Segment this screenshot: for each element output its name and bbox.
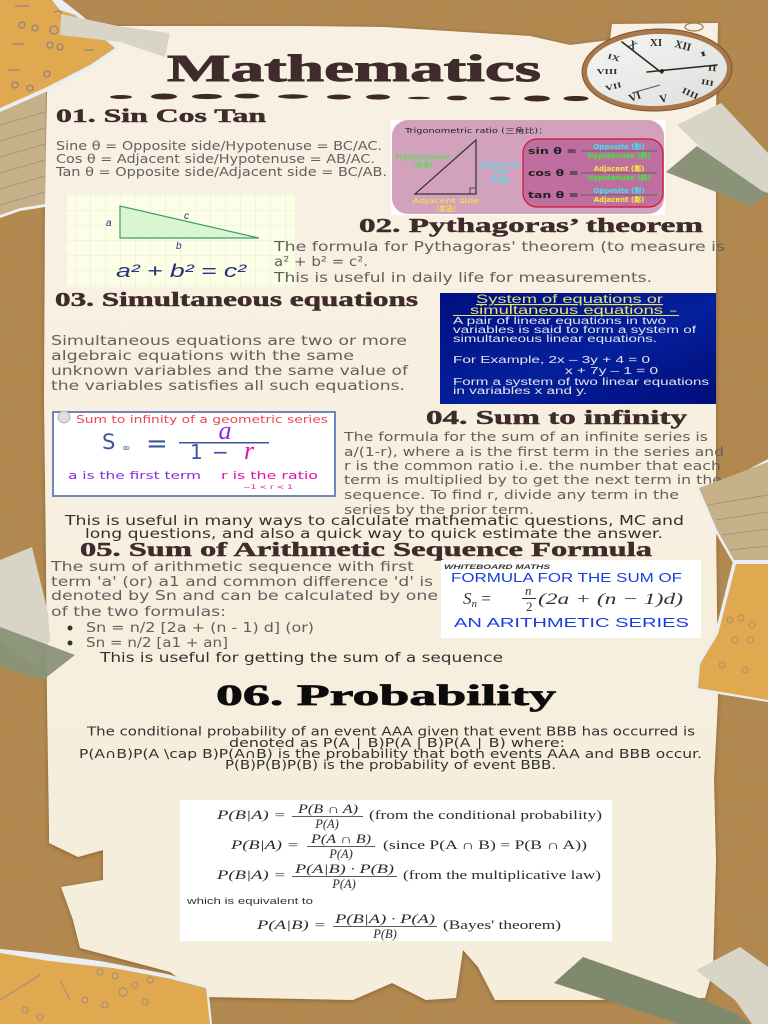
system of equations slide: System of equations or [476, 294, 663, 306]
title: Mathematics [167, 48, 541, 90]
section 06 heading: 06. Probability [216, 679, 556, 712]
arithmetic series formula card: FORMULA FOR THE SUM OF [451, 571, 682, 585]
icon: wall clock: I [699, 49, 708, 59]
line 3 of formula derivation: P(A|B) · P(B) [294, 862, 394, 876]
right triangle diagram: c [184, 211, 189, 222]
trigonometric ratio diagram: Trigonometric ratio (三角比)： [404, 126, 548, 135]
section 03 text: algebraic equations with the same [51, 349, 354, 364]
arithmetic series formula card: (2a + (n − 1)d) [538, 591, 683, 608]
section 04 heading: 04. Sum to infinity [426, 407, 687, 429]
section 05 text: The sum of arithmetic sequence with first [50, 560, 414, 575]
system of equations slide: simultaneous linear equations. [453, 334, 657, 345]
section 02 text: a² + b² = c². [274, 255, 368, 270]
section 04 text: sequence. To find r, divide any term in the [344, 488, 679, 502]
section 01 text: Tan θ = Opposite side/Adjacent side = BC/AB. [55, 165, 387, 179]
arithmetic series formula card: S [463, 589, 472, 608]
icon: wall clock: VI [627, 89, 643, 105]
section 05 text: term 'a' (or) a1 and common difference 'd' is [51, 575, 433, 590]
sum to infinity formula card: − [212, 440, 229, 464]
sum to infinity formula card: −1 < r < 1 [243, 484, 293, 491]
line 2 of formula derivation: P(A ∩ B) [310, 832, 371, 846]
arithmetic series formula card: = [477, 589, 491, 608]
arithmetic series formula card: n [525, 583, 532, 598]
section 04 usefulness note [64, 514, 684, 542]
arithmetic series formula card: 2 [526, 599, 532, 614]
section 02 text [273, 240, 725, 286]
line 1 of formula derivation: P(A) [314, 817, 339, 831]
conditional probability and Bayes formula card [180, 800, 612, 941]
section 05 formula bullets [68, 621, 314, 651]
icon: wall clock: X [626, 38, 639, 53]
trigonometric ratio diagram: tan θ = [528, 191, 579, 201]
section 03 heading: 03. Simultaneous equations [55, 289, 418, 311]
trigonometric ratio diagram [391, 120, 665, 215]
icon: wall clock: XI [650, 37, 662, 49]
section 05 text: of the two formulas: [51, 605, 226, 620]
system of equations slide: in variables x and y. [453, 386, 587, 397]
right triangle diagram: b [176, 241, 182, 252]
section 05 heading: 05. Sum of Arithmetic Sequence Formula [80, 539, 652, 561]
section 04 usefulness note: long questions, and also a quick way to quick estimate the answer. [85, 527, 663, 542]
system of equations slide: – [670, 305, 677, 317]
line 2 of formula derivation: P(B|A) = [230, 838, 299, 852]
brush dash divider under title [110, 94, 588, 102]
section 05 usefulness note: This is useful for getting the sum of a sequence [99, 651, 503, 666]
tape and green strip, left [0, 547, 75, 680]
arithmetic series formula card: n [472, 598, 478, 610]
sum to infinity formula card: ∞ [122, 443, 130, 454]
trigonometric ratio diagram: Opposite (對) [593, 142, 645, 151]
sum to infinity formula card: 1 [190, 440, 203, 464]
section 01 text: Sine θ = Opposite side/Hypotenuse = BC/AC. [56, 139, 382, 153]
torn lined paper, left [0, 92, 46, 218]
arithmetic series formula card: WHITEBOARD MATHS [444, 564, 551, 571]
section 04 text: term is multiplied by to get the next term in the [344, 473, 722, 487]
section 02 text: The formula for Pythagoras' theorem (to measure is [273, 240, 725, 255]
trigonometric ratio diagram: Opposite (對) [593, 186, 645, 195]
section 01 text: Cos θ = Adjacent side/Hypotenuse = AB/AC. [56, 152, 375, 166]
trigonometric ratio diagram: Opposite [480, 161, 520, 169]
trigonometric ratio diagram: Adjacent side [412, 197, 480, 205]
icon: wall clock: IIII [680, 86, 700, 102]
trigonometric ratio diagram: (鄰邊) [436, 204, 456, 213]
masking tape, top left [60, 14, 170, 57]
line 2 of formula derivation: P(A) [328, 847, 353, 861]
system of equations slide: simultaneous equations [470, 305, 663, 317]
line 2 of formula derivation [230, 832, 587, 861]
section 04 usefulness note: This is useful in many ways to calculate mathematic questions, MC and [64, 514, 684, 529]
section 06 text: P(B)P(B)P(B) is the probability of event BBB. [225, 758, 556, 772]
sum to infinity formula card: = [146, 429, 168, 459]
right triangle diagram: a² + b² = c² [116, 261, 247, 281]
arithmetic series formula card [441, 560, 701, 638]
torn lined paper, right [696, 459, 768, 563]
trigonometric ratio diagram: Hypotenuse (斜) [587, 151, 651, 160]
section 05 formula bullets: Sn = n/2 [a1 + an] [86, 636, 228, 651]
section 05 text: denoted by Sn and can be calculated by one [51, 589, 438, 604]
trigonometric ratio diagram: Adjacent (鄰) [594, 164, 644, 173]
section 01 heading: 01. Sin Cos Tan [56, 107, 267, 127]
trigonometric ratio diagram: side [493, 168, 507, 176]
section 05 text [50, 560, 438, 620]
trigonometric ratio diagram: Hypotenuse (斜) [587, 173, 651, 182]
line 1 of formula derivation: (from the conditional probability) [369, 808, 602, 822]
trigonometric ratio diagram: (斜邊) [413, 160, 433, 169]
arithmetic series formula card: AN ARITHMETIC SERIES [454, 615, 689, 630]
trigonometric ratio diagram: Adjacent (鄰) [594, 195, 644, 204]
torn orange patterned paper, bottom left [0, 949, 212, 1024]
section 02 text: This is useful in daily life for measurements. [273, 271, 652, 286]
trigonometric ratio diagram: sin θ = [528, 147, 577, 157]
right triangle diagram: a [106, 218, 112, 229]
Bayes theorem: P(A|B) = [256, 918, 326, 932]
line 1 of formula derivation: P(B ∩ A) [297, 802, 358, 816]
section 03 text: Simultaneous equations are two or more [51, 334, 407, 349]
section 01 text [55, 139, 387, 179]
section 02 heading: 02. Pythagoras’ theorem [359, 215, 704, 237]
line 3 of formula derivation [216, 862, 601, 891]
icon: wall clock: V [659, 92, 668, 106]
tape and green strip, bottom right [554, 947, 768, 1024]
system of equations slide: x + 7y – 1 = 0 [565, 366, 659, 377]
section 03 text: the variables satisfies all such equations. [51, 379, 405, 394]
system of equations slide: For Example, 2x – 3y + 4 = 0 [453, 355, 651, 366]
sum to infinity formula card [53, 411, 335, 496]
trigonometric ratio diagram: Hypotenuse [396, 153, 450, 161]
section 06 text: denoted as P(A ∣ B)P(A | B)P(A ∣ B) where: [229, 736, 565, 750]
torn orange patterned paper, top left [0, 0, 120, 113]
system of equations slide [440, 293, 716, 404]
sum to infinity formula card: r [244, 436, 255, 465]
line 1 of formula derivation [216, 802, 602, 831]
Bayes theorem [256, 912, 561, 941]
right triangle diagram [67, 194, 295, 287]
section 03 text [51, 334, 409, 394]
line 2 of formula derivation: (since P(A ∩ B) = P(B ∩ A)) [383, 838, 587, 852]
Bayes theorem: P(B|A) · P(A) [334, 912, 435, 926]
line 1 of formula derivation: P(B|A) = [216, 808, 286, 822]
torn orange patterned paper, right [694, 561, 768, 702]
section 04 text: The formula for the sum of an infinite series is [343, 430, 708, 444]
line 3 of formula derivation: P(A) [331, 877, 356, 891]
system of equations slide: Form a system of two linear equations [453, 377, 709, 388]
sum to infinity formula card: a is the first term [68, 469, 201, 482]
Bayes theorem: P(B) [372, 927, 397, 941]
icon: wall clock [581, 23, 733, 114]
system of equations slide: A pair of linear equations in two [453, 316, 667, 327]
icon: wall clock: II [708, 65, 717, 74]
section 06 text [79, 724, 702, 772]
section 06 text: P(A∩B)P(A \cap B)P(A∩B) is the probability that both events AAA and BBB occur. [79, 747, 702, 761]
trigonometric ratio diagram: (對邊) [490, 175, 510, 184]
trigonometric ratio diagram: cos θ = [528, 169, 579, 179]
sum to infinity formula card: a [218, 416, 232, 445]
sum to infinity formula card: Sum to infinity of a geometric series [76, 413, 328, 426]
section 06 text: The conditional probability of an event AAA given that event BBB has occurred is [86, 724, 695, 738]
sum to infinity formula card: r is the ratio [221, 469, 318, 482]
icon: wall clock: VII [605, 81, 623, 93]
section 04 text: r is the common ratio i.e. the number that each [344, 459, 721, 473]
line 3 of formula derivation: (from the multiplicative law) [403, 868, 601, 882]
Bayes theorem: (Bayes' theorem) [443, 918, 561, 932]
equivalence note: which is equivalent to [186, 896, 313, 907]
line 3 of formula derivation: P(B|A) = [216, 868, 286, 882]
icon: wall clock: III [700, 78, 715, 89]
section 04 text: a/(1-r), where a is the first term in the series and [344, 445, 724, 459]
icon: wall clock: VIII [597, 68, 618, 76]
section 03 text: unknown variables and the same value of [51, 364, 409, 379]
icon: wall clock: IX [606, 53, 621, 64]
sum to infinity formula card: S [102, 430, 115, 454]
section 05 formula bullets: Sn = n/2 [2a + (n - 1) d] (or) [86, 621, 314, 636]
tape under clock, right [666, 103, 768, 206]
section 04 text [343, 430, 724, 517]
system of equations slide: variables is said to form a system of [453, 325, 696, 336]
icon: wall clock: XII [673, 38, 692, 54]
section 04 text: series by the prior term. [344, 503, 534, 517]
